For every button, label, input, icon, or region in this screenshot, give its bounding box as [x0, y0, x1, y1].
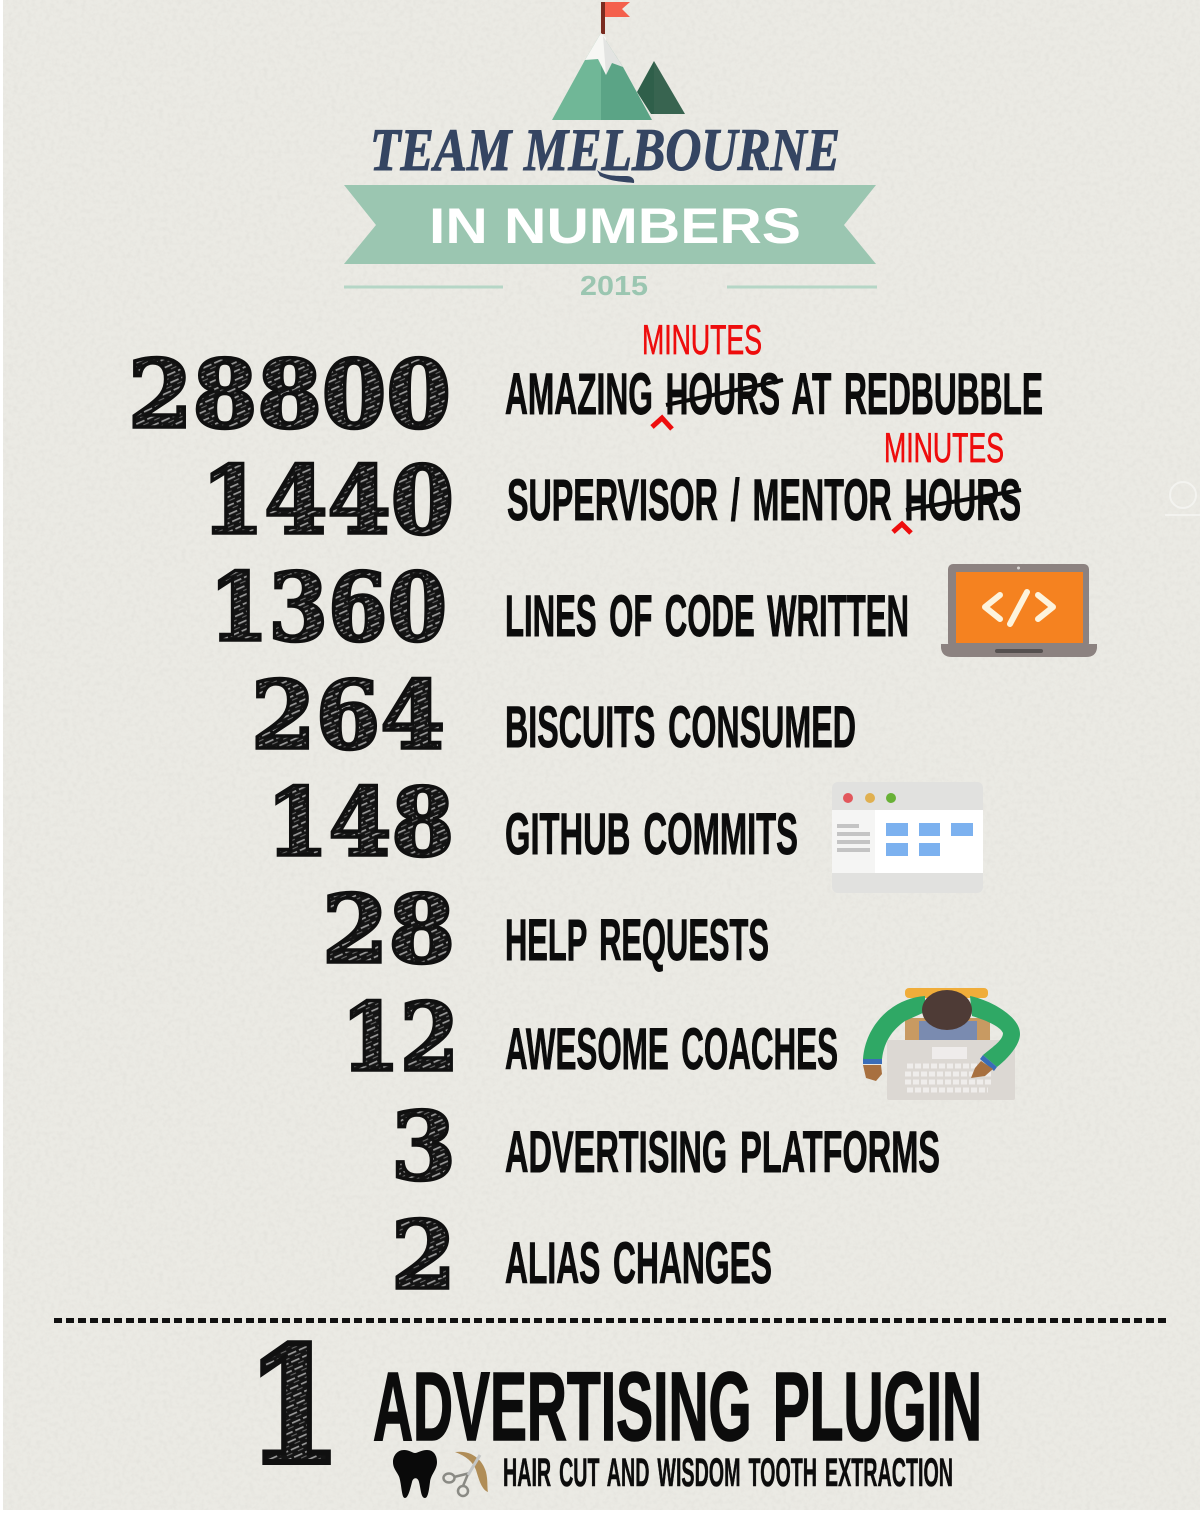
stat: 1440 minutes — [201, 424, 1021, 556]
icon: tooth — [393, 1450, 437, 1498]
icon: scissors and hair — [444, 1452, 488, 1496]
stat: 1440 minutes: MINUTES — [884, 424, 1004, 471]
stat: 1 advertising plugin — [246, 1312, 982, 1500]
stat: 2 alias changes — [391, 1201, 772, 1311]
ribbon: in numbers: IN NUMBERS — [429, 198, 801, 254]
stat: 3 advertising platforms: 3 — [391, 1092, 456, 1202]
stat: 2 alias changes: ALIAS CHANGES — [505, 1231, 772, 1296]
stat: 1360 lines of code: 1360 — [209, 553, 447, 663]
stat: 28 help requests — [322, 875, 769, 985]
icon: faint watermark — [1165, 482, 1200, 515]
icon: person at laptop from above — [863, 988, 1020, 1100]
stat: 1360 lines of code — [209, 553, 909, 663]
year — [344, 270, 877, 301]
stat: 148 github commits: GITHUB COMMITS — [505, 802, 798, 867]
stat: 28 help requests: HELP REQUESTS — [505, 908, 769, 973]
icon: laptop with code — [941, 564, 1097, 657]
stat: 148 github commits: 148 — [266, 768, 454, 878]
stat: 12 coaches — [341, 983, 838, 1093]
title: TEAM MELBOURNE — [370, 117, 840, 183]
stat: 1 advertising plugin: 1 — [246, 1312, 342, 1500]
stat: 28 help requests: 28 — [322, 875, 455, 985]
stat: 28800 minutes — [128, 316, 1043, 450]
stat: 12 coaches: AWESOME COACHES — [505, 1017, 838, 1082]
stat: 12 coaches: 12 — [341, 983, 459, 1093]
year: 2015 — [580, 270, 648, 301]
stat: 28800 minutes: MINUTES — [642, 316, 762, 363]
stat: 3 advertising platforms — [391, 1092, 940, 1202]
stat: 1440 minutes: 1440 — [201, 446, 454, 556]
stat: 28800 minutes: 28800 — [128, 340, 451, 450]
stat: 264 biscuits — [251, 661, 856, 771]
icon: mountains with flag — [552, 2, 685, 120]
icon: browser window — [832, 782, 983, 893]
ribbon: in numbers — [344, 185, 876, 264]
stat: 2 alias changes: 2 — [391, 1201, 456, 1311]
stat: 264 biscuits: 264 — [251, 661, 445, 771]
header — [344, 2, 877, 301]
stat: 148 github commits — [266, 768, 798, 878]
stat: 264 biscuits: BISCUITS CONSUMED — [505, 695, 856, 760]
